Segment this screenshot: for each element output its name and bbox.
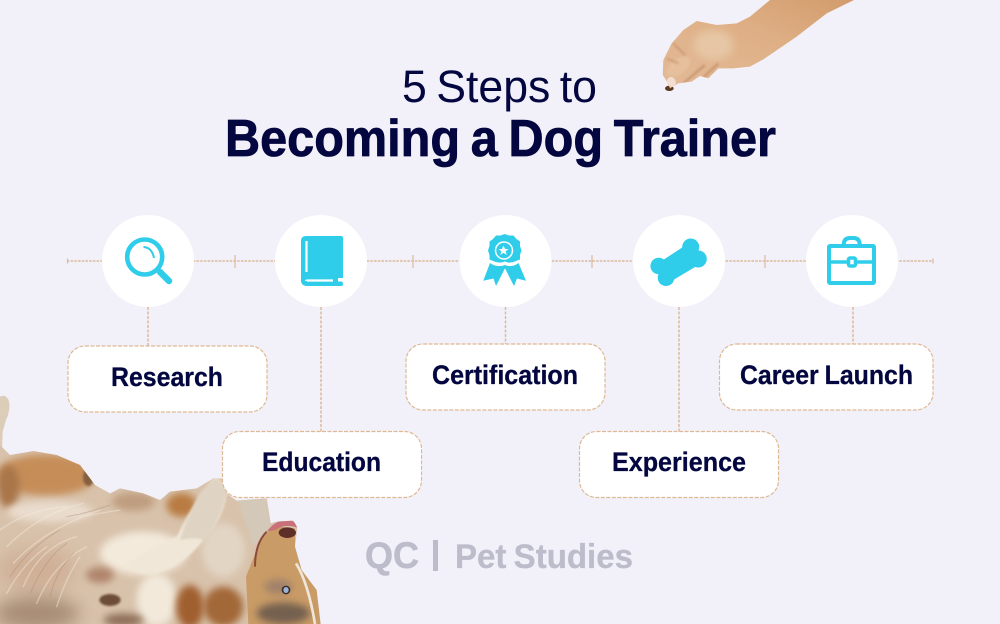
icon circle [460,215,552,307]
label box [406,344,605,410]
dog front leg [172,478,228,560]
photo: dog lying upside down [0,396,323,624]
icon: magnifying glass [127,240,169,281]
treat [665,86,674,91]
dog fur strands [0,503,120,607]
label: Career Launch [740,360,913,390]
dog hind paw [0,396,9,453]
title line 2: Becoming a Dog Trainer [225,110,776,168]
label: Education [262,447,381,477]
logo divider [433,540,438,571]
logo mark: QC [365,535,419,576]
label box [720,344,933,410]
icon: briefcase [829,238,874,283]
icon circle [633,215,725,307]
label: Research [111,362,223,392]
label: Experience [612,447,746,477]
dog nose [279,527,296,538]
icon: book [301,236,343,286]
label box [68,346,267,412]
dog tongue [267,520,297,532]
icon: bone [650,238,707,286]
step 1: research [68,215,267,412]
icon circle [806,215,898,307]
hand and arm [662,0,854,88]
label: Certification [432,360,578,390]
dog face [246,527,321,624]
step 5: career launch [720,215,933,410]
icon circle [102,215,194,307]
dog body [0,440,323,624]
photo: hand holding treat [662,0,854,91]
icon: award ribbon [483,234,526,286]
logo name: Pet Studies [455,538,633,576]
label box [580,432,778,498]
step 4: experience [580,215,778,498]
icon circle [275,215,367,307]
timeline [67,255,933,268]
label box [222,432,422,498]
logo: QC Pet Studies [365,535,633,576]
step 3: certification [406,215,605,410]
step 2: education [222,215,422,498]
title [225,61,776,168]
title line 1: 5 Steps to [402,61,597,112]
connectors [148,307,853,432]
